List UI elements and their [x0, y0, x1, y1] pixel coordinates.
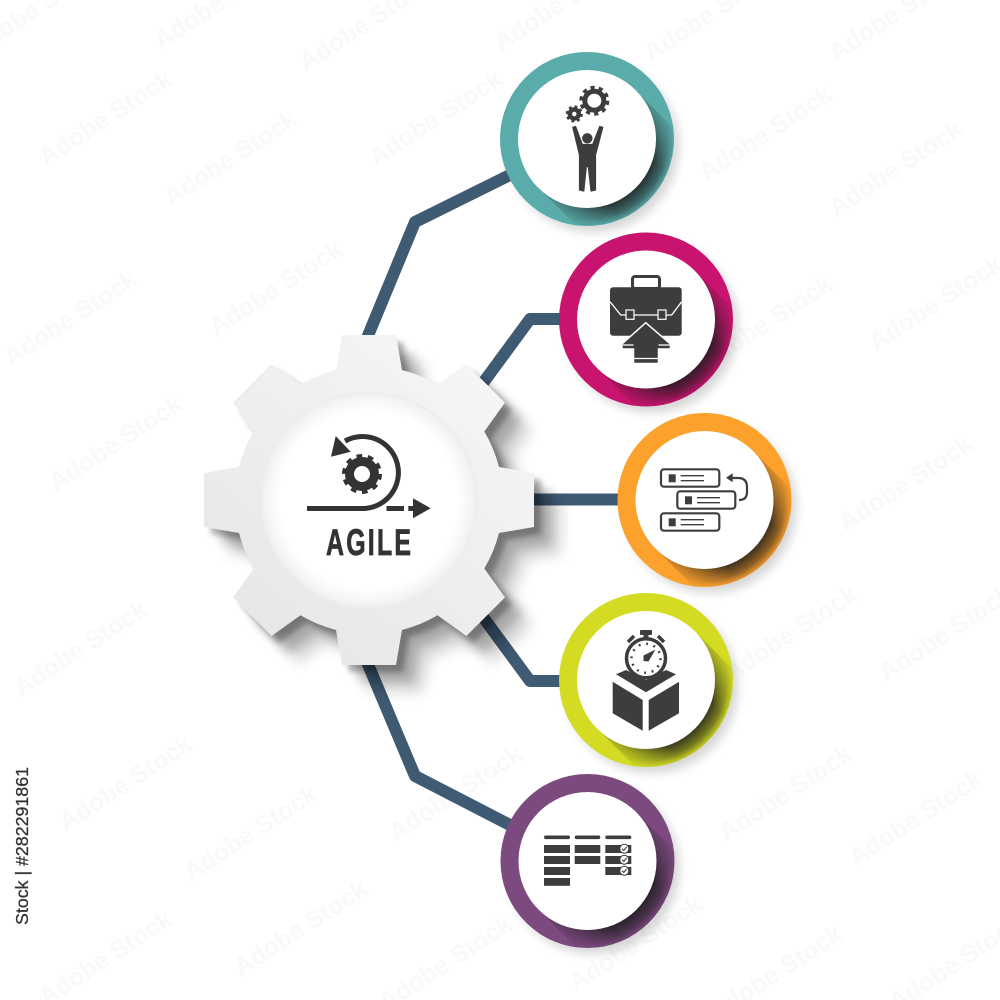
icon: kanban table — [544, 836, 631, 886]
watermark pattern: Adobe Stock — [564, 890, 707, 997]
watermark pattern: Adobe Stock — [844, 765, 987, 872]
watermark pattern: Adobe Stock — [694, 270, 837, 377]
central gear — [204, 335, 561, 692]
node: purple, task board — [500, 774, 683, 958]
icon: briefcase — [610, 276, 682, 364]
watermark pattern: Adobe Stock — [714, 740, 857, 847]
node: lime, stopwatch on box — [559, 593, 742, 776]
watermark pattern: Adobe Stock — [44, 390, 187, 497]
ring — [500, 52, 682, 236]
icon: agile loop with gear — [307, 436, 431, 563]
node: teal, person with gears — [500, 52, 682, 236]
loop arrowhead — [331, 436, 351, 457]
node: magenta, briefcase with arrow — [559, 232, 742, 416]
icon: person juggling gears — [567, 87, 608, 191]
watermark pattern: Adobe Stock — [9, 595, 152, 702]
watermark pattern: Adobe Stock — [384, 740, 527, 847]
node: orange, backlog list — [618, 413, 800, 596]
gear body — [204, 335, 534, 665]
gear hub — [260, 392, 478, 608]
gear shadow — [211, 342, 561, 692]
dashed forward arrow — [386, 498, 431, 518]
watermark pattern: Adobe Stock — [204, 235, 347, 342]
ring — [559, 593, 742, 776]
watermark pattern: Adobe Stock — [834, 430, 977, 537]
watermark pattern: Adobe Stock — [719, 580, 862, 687]
stock number side text: Stock | #282291861 — [12, 767, 32, 925]
watermark pattern: Adobe Stock — [364, 65, 507, 172]
icon: stopwatch and box — [613, 630, 679, 731]
watermark pattern: Adobe Stock — [229, 875, 372, 982]
watermark pattern: Adobe Stock — [54, 730, 197, 837]
watermark pattern: Adobe Stock — [0, 265, 142, 372]
ring — [618, 413, 800, 596]
icon: reordered list — [661, 469, 747, 531]
watermark pattern: Adobe Stock — [179, 780, 322, 887]
connector lines — [367, 174, 625, 826]
watermark pattern: Adobe Stock — [694, 80, 837, 187]
label: AGILE: AGILE — [326, 522, 413, 563]
loop path — [307, 437, 398, 509]
watermark pattern: Adobe Stock — [159, 105, 302, 212]
small gear — [344, 456, 380, 492]
watermark pattern: Adobe Stock — [34, 65, 177, 172]
watermark pattern: Adobe Stock — [824, 115, 967, 222]
ring — [559, 232, 742, 416]
ring — [500, 774, 683, 958]
